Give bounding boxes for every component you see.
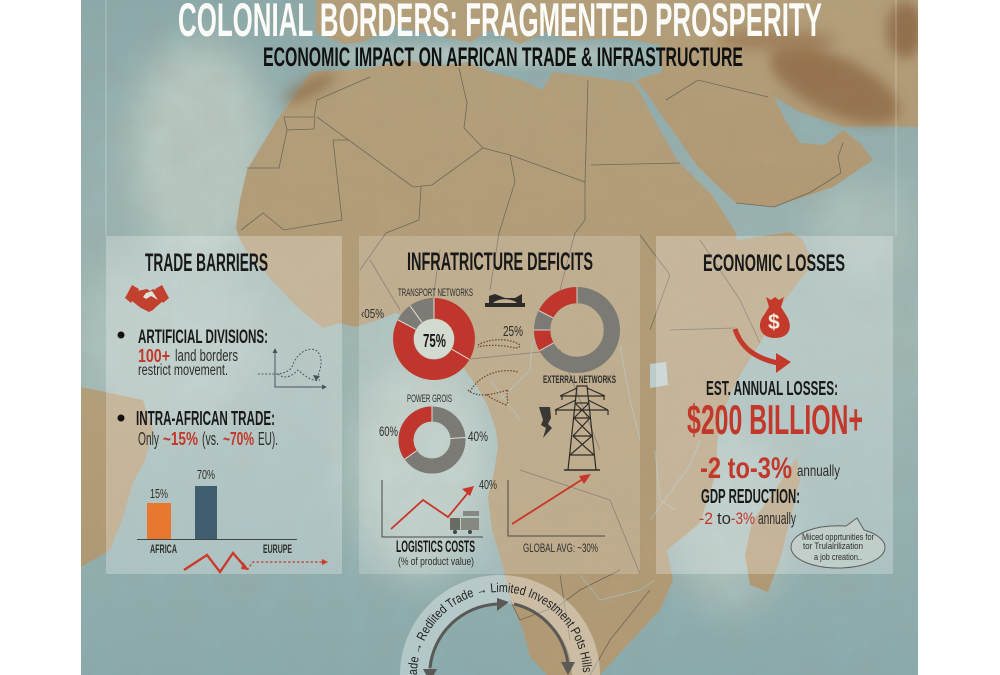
heading: trade barriers: TRADE BARRIERS xyxy=(145,249,268,277)
panel: economic losses xyxy=(656,236,893,574)
icon: handshake xyxy=(125,285,169,312)
bar chart: trade share: AFRICA xyxy=(150,542,177,556)
text: land borders: land borders xyxy=(175,347,238,365)
Europe, Asia and Arabian peninsula landmass xyxy=(316,0,918,207)
donut chart: power grids xyxy=(399,406,466,466)
text: land borders: restrict movement. xyxy=(138,362,228,379)
text: trade comparison: Only xyxy=(138,429,159,449)
label: transport networks: TRANSPORT NETWORKS xyxy=(398,287,473,299)
line chart: logistics costs: 40% xyxy=(479,477,497,492)
cycle diagram xyxy=(400,575,600,675)
text: gdp percent: -3% xyxy=(731,509,755,528)
text: gdp percent: -2 xyxy=(699,509,713,528)
country borders xyxy=(241,68,843,675)
heading: economic losses: ECONOMIC LOSSES xyxy=(703,250,845,277)
label: power grids: POWER GROIS xyxy=(407,393,452,405)
icon: bridge xyxy=(485,294,525,307)
text: gdp percent xyxy=(699,509,796,528)
icon: dotted loop chart xyxy=(258,348,327,390)
text: estimated annual losses: EST. ANNUAL LOSSES: xyxy=(706,378,838,400)
text: intra-african trade: INTRA-AFRICAN TRADE: xyxy=(136,408,275,430)
South America xyxy=(81,387,153,567)
label: external networks: EXTERRAL NETWORKS xyxy=(543,374,616,386)
label: percent of product value: (% of product value) xyxy=(398,556,474,568)
label: logistics costs: LOGISTICS COSTS xyxy=(396,537,475,556)
text: land borders: 100+ xyxy=(138,346,170,366)
label: 60 percent: 60% xyxy=(379,423,398,439)
bar chart: trade share: EURUPE xyxy=(263,542,292,556)
bullet xyxy=(118,414,124,422)
icon: dotted route lines xyxy=(468,340,520,405)
text: artificial divisions: ARTIFICIAL DIVISIONS: xyxy=(138,326,268,348)
text: trade comparison: ~70% xyxy=(223,429,254,449)
rivers and lakes xyxy=(490,320,700,600)
line chart: global average xyxy=(508,474,605,536)
bar chart: trade share: 70% xyxy=(197,467,215,482)
callout: missed opportunities: tor Trulalrilization xyxy=(803,541,863,551)
callout: missed opportunities: Miiced opprtunities for xyxy=(802,532,874,542)
arrow: zigzag red decline xyxy=(184,553,328,572)
frame lines xyxy=(106,0,896,236)
label: 25 percent: 25% xyxy=(503,323,523,340)
Madagascar xyxy=(745,457,800,592)
icon: money bag: $ xyxy=(768,311,780,334)
heading: infrastructure deficits: INFRATRICTURE DEFICITS xyxy=(407,248,593,276)
text: gdp reduction: GDP REDUCTION: xyxy=(701,486,800,508)
bar chart: trade share: 15% xyxy=(150,486,168,501)
label: 40 percent: 40% xyxy=(468,428,488,444)
arrow: left arc xyxy=(423,598,509,675)
donut chart: transport networks xyxy=(398,298,470,370)
panel: trade barriers xyxy=(106,236,342,574)
donut chart: transport networks: 75% xyxy=(423,331,446,351)
text: trade comparison: (vs. xyxy=(202,429,219,449)
Africa landmass xyxy=(236,60,813,675)
icon: money bag xyxy=(760,297,790,338)
bar chart: trade share xyxy=(137,467,297,556)
stat: annual percent: -2 to-3% xyxy=(700,452,792,485)
arrow: downward curve xyxy=(735,329,791,373)
bullet xyxy=(118,332,124,338)
text: trade comparison xyxy=(138,429,278,449)
stat: annual percent: annually xyxy=(797,463,840,480)
icon: lightning xyxy=(539,407,552,438)
callout: missed opportunities xyxy=(791,518,885,568)
text: trade comparison: EU). xyxy=(258,429,278,449)
line chart: logistics costs xyxy=(382,477,497,537)
icon: transmission tower xyxy=(555,386,608,470)
text: gdp percent: annually xyxy=(758,509,796,528)
arrow: right arc xyxy=(514,604,575,675)
cycle text: ade → Redlited Trade → Limited Investment Pots Hills xyxy=(408,582,592,675)
donut chart: external networks xyxy=(534,287,612,365)
stat: 200 billion: $200 BILLION+ xyxy=(687,396,863,443)
mountain shading xyxy=(282,2,923,140)
label: 05 percent: ‹05% xyxy=(361,306,384,321)
icon: truck xyxy=(450,511,479,534)
text: gdp percent: to xyxy=(717,509,731,528)
panel: infrastructure deficits xyxy=(359,236,640,574)
text: trade comparison: ~15% xyxy=(163,429,198,449)
text: land borders xyxy=(138,346,238,379)
label: global average: GLOBAL AVG: ~30% xyxy=(523,541,598,555)
callout: missed opportunities: a job creation.. xyxy=(814,552,862,562)
